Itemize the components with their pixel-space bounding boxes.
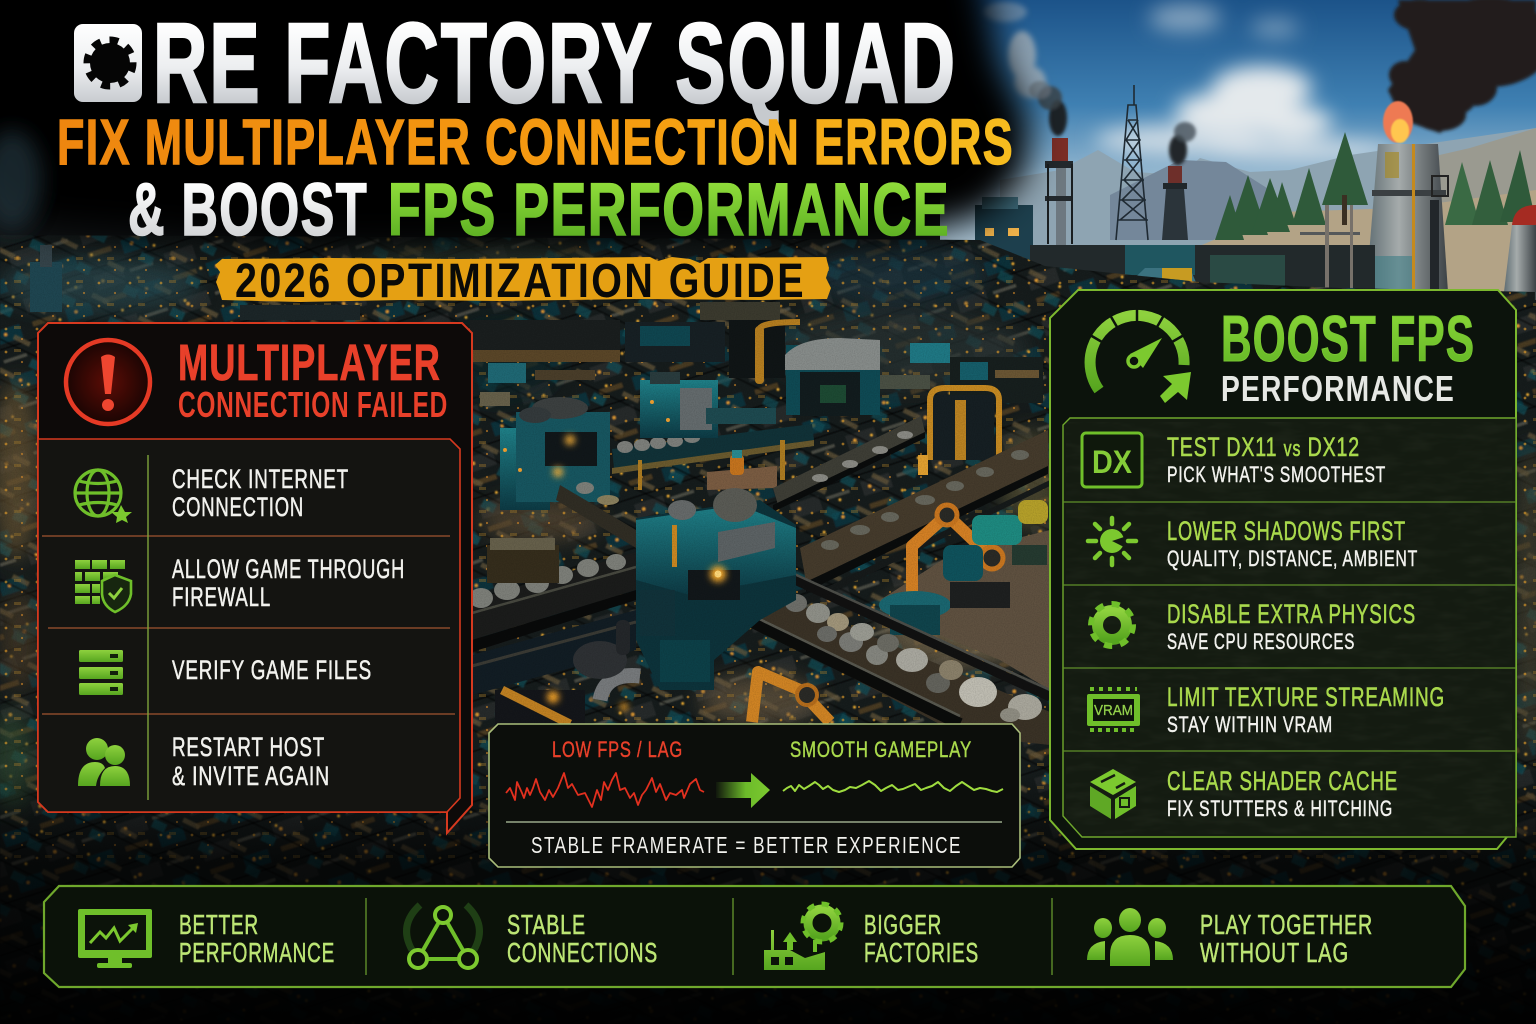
heading: performance: PERFORMANCE (1221, 368, 1455, 409)
inner list panel (1063, 418, 1516, 837)
title vignette (0, 0, 1030, 245)
text: clear shader cache: CLEAR SHADER CACHE (1167, 766, 1398, 796)
text: check internet connection: CHECK INTERNET (172, 464, 349, 494)
arrow (716, 773, 770, 808)
row dividers (1063, 502, 1516, 751)
text: better performance: PERFORMANCE (179, 937, 335, 968)
divider (506, 821, 1002, 823)
text: allow game through firewall (172, 554, 405, 612)
front conveyor (751, 574, 1049, 745)
flame (1383, 101, 1413, 143)
rocks on left conveyor (469, 482, 626, 608)
icon: firewall shield (75, 560, 131, 612)
dividers (366, 898, 1052, 975)
text: limit texture streaming (1167, 682, 1445, 737)
inner list panel (38, 439, 460, 812)
caption: STABLE FRAMERATE = BETTER EXPERIENCE (531, 832, 962, 858)
colour patches (0, 242, 1536, 810)
robot arm right (912, 505, 1003, 596)
text: better performance: BETTER (179, 909, 259, 940)
smoke: small plumes (1029, 81, 1196, 165)
text: lower shadows first: LOWER SHADOWS FIRST (1167, 516, 1406, 546)
sky (940, 0, 1536, 300)
panel: framerate comparison (489, 724, 1020, 867)
text: disable extra physics (1167, 599, 1416, 654)
heading: multiplayer: MULTIPLAYER (178, 334, 441, 391)
upper band: dark machinery (30, 245, 1043, 406)
text: stable connections (507, 909, 658, 968)
icon: DX: DX (1092, 444, 1133, 480)
small machine left (487, 538, 559, 583)
mountains (1000, 128, 1536, 292)
text: restart host invite again (172, 732, 330, 791)
icon: players (78, 738, 130, 786)
ground layer (0, 235, 1536, 1024)
icon: shadows sun (1088, 518, 1136, 565)
text: limit texture streaming: STAY WITHIN VRAM (1167, 712, 1333, 737)
label: smooth gameplay: SMOOTH GAMEPLAY (790, 737, 972, 762)
icon: monitor (78, 909, 152, 968)
text: lower shadows first: QUALITY, DISTANCE, AMBIENT (1167, 546, 1418, 571)
title: Ore Factory Squad: RE FACTORY SQUAD (153, 0, 957, 126)
icon: DX (1082, 433, 1142, 487)
icon: VRAM chip (1087, 689, 1140, 730)
upper left haze (0, 130, 42, 230)
title block (57, 0, 1014, 308)
clouds (1095, 4, 1400, 161)
icon: VRAM chip: VRAM (1094, 702, 1133, 719)
fine grain (0, 236, 1536, 846)
text: allow game through firewall: ALLOW GAME THROUGH (172, 554, 405, 584)
trees (1215, 132, 1536, 240)
panel frame (489, 724, 1020, 867)
bottom orange arm (752, 672, 830, 722)
machinery: skyline (975, 197, 1375, 293)
label: low fps: LOW FPS / LAG (552, 737, 683, 762)
text: test dx11 vs dx12 (1167, 432, 1386, 487)
panel: boost fps performance (1050, 290, 1516, 849)
chimney: left (1045, 138, 1073, 254)
oil tower lattice (1116, 85, 1148, 240)
text: stable connections: CONNECTIONS (507, 937, 658, 968)
floor (880, 530, 1050, 690)
lower darkening (0, 770, 1536, 1024)
rocks: middle belt (617, 438, 700, 453)
upper right conveyors (773, 416, 1050, 608)
text: stable connections: STABLE (507, 909, 586, 940)
subtitle: fps performance: FPS PERFORMANCE (388, 168, 950, 251)
text: clear shader cache: FIX STUTTERS & HITCHING (1167, 796, 1393, 821)
orange arch machine (918, 388, 999, 475)
heading: connection failed: CONNECTION FAILED (178, 384, 448, 425)
panel: multiplayer connection failed (38, 323, 472, 833)
text: disable extra physics: SAVE CPU RESOURCES (1167, 629, 1355, 654)
panel frame (1050, 290, 1516, 849)
bottom left pipes (495, 620, 640, 724)
left conveyor (472, 485, 636, 695)
text: check internet connection (172, 464, 349, 522)
bar frame (44, 886, 1465, 987)
icon: alert circle (66, 340, 150, 424)
row mottling (1066, 422, 1512, 834)
chimney: middle (1162, 166, 1188, 240)
horizontal belt: middle (612, 424, 814, 490)
text: clear shader cache (1167, 766, 1398, 821)
factory base (0, 235, 1536, 1024)
text: allow game through firewall: FIREWALL (172, 582, 271, 612)
light smoke trail (983, 2, 1046, 98)
subtitle: boost: & BOOST (128, 168, 368, 251)
banner: 2026 optimization guide: 2026 OPTIMIZATION GUIDE (235, 255, 806, 308)
chimney: red right (1504, 205, 1536, 292)
text: verify game files: VERIFY GAME FILES (172, 655, 372, 685)
icon: gear (1091, 604, 1133, 646)
scattered lights (0, 240, 1536, 860)
text: restart host invite again: & INVITE AGAIN (172, 761, 330, 791)
text: disable extra physics: DISABLE EXTRA PHYSICS (1167, 599, 1416, 629)
rocks on upper conveyors (812, 431, 1029, 550)
robot base and teal machinery (879, 500, 1048, 635)
text: restart host invite again: RESTART HOST (172, 732, 325, 762)
main teal crusher (636, 488, 796, 690)
row dividers (42, 455, 455, 800)
icon: server files (79, 650, 123, 695)
text: bigger factories: FACTORIES (864, 937, 979, 968)
base texture (0, 235, 1536, 1024)
icon: network triangle (407, 905, 479, 968)
subtitle: fix multiplayer: FIX MULTIPLAYER CONNECTION ERRORS (57, 106, 1014, 178)
left machine (500, 397, 610, 510)
upper machine: grey tank (755, 322, 880, 416)
text: bigger factories: BIGGER (864, 909, 942, 940)
chart: lag line (506, 773, 704, 807)
chimney: big (1366, 144, 1448, 292)
icon: group (1087, 908, 1173, 966)
text: test dx11 vs dx12: TEST DX11 vs DX12 (1167, 432, 1360, 462)
text: better performance (179, 909, 335, 968)
text: play together without lag: WITHOUT LAG (1200, 937, 1349, 968)
text: play together without lag: PLAY TOGETHER (1200, 909, 1373, 940)
chart: smooth line (783, 781, 1003, 792)
middle machine (640, 372, 776, 438)
logo: gear O (74, 24, 142, 102)
text: check internet connection: CONNECTION (172, 492, 304, 522)
icon: shader cache box (1090, 769, 1136, 819)
icon: globe (75, 470, 132, 523)
rocks on front conveyor (786, 594, 1042, 722)
text: play together without lag (1200, 909, 1373, 968)
text: bigger factories (864, 909, 979, 968)
panel: benefits bar (44, 886, 1465, 987)
text: lower shadows first (1167, 516, 1418, 571)
smoke: large plume (1388, 0, 1536, 133)
icon: speedometer (1090, 308, 1191, 403)
text: test dx11 vs dx12: PICK WHAT'S SMOOTHEST (1167, 462, 1386, 487)
icon: factory gear (764, 904, 841, 970)
panel frame (38, 323, 472, 833)
